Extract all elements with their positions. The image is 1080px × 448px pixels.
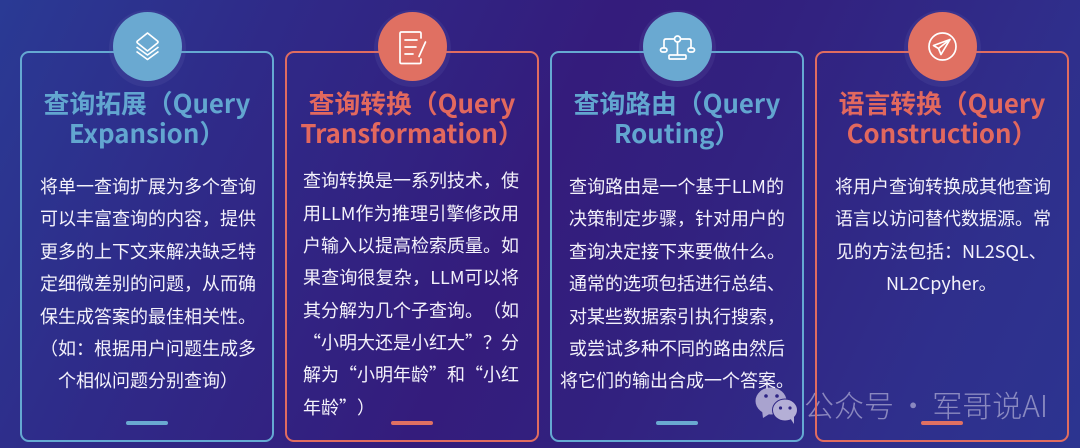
heading: Routing） (614, 114, 740, 151)
body text: 查询路由是一个基于LLM的 (569, 173, 784, 199)
icon: document with pen (378, 12, 446, 80)
icon: scales (642, 12, 712, 80)
body text: 见的方法包括：NL2SQL、 (836, 238, 1047, 264)
body text: 更多的上下文来解决缺乏特 (40, 238, 256, 264)
icon halo (904, 10, 980, 87)
body text: 可以丰富查询的内容，提供 (40, 205, 256, 231)
heading: 查询转换（Query (309, 84, 515, 121)
heading (839, 84, 1045, 151)
body text (303, 167, 519, 420)
heading (300, 84, 524, 151)
body text: 定细微差别的问题，从而确 (40, 270, 256, 296)
body text (40, 173, 256, 393)
watermark: 公众号 军哥说AI (756, 382, 1048, 426)
body text: 个相似问题分别查询） (58, 367, 238, 393)
body text: 将它们的输出合成一个答案。 (560, 367, 794, 393)
heading: 语言转换（Query (839, 84, 1045, 121)
body text: 户输入以提高检索质量。如 (303, 232, 519, 258)
card border (550, 51, 804, 442)
icon halo (108, 10, 186, 87)
body text: 通常的选项包括进行总结、 (569, 270, 785, 296)
body text: “小明大还是小红大”？分 (303, 329, 519, 355)
body text: 语言以访问替代数据源。常 (835, 205, 1051, 231)
heading: 查询路由（Query (574, 84, 780, 121)
card border (285, 51, 539, 442)
panel: 语言转换 (815, 10, 1069, 442)
accent bar (656, 421, 698, 425)
heading (574, 84, 780, 151)
body text: 将单一查询扩展为多个查询 (40, 173, 256, 199)
icon halo (374, 10, 450, 87)
body text: 年龄”） (303, 394, 375, 420)
body text: 查询转换是一系列技术，使 (303, 167, 519, 193)
accent bar (126, 421, 168, 425)
body text: 对某些数据索引执行搜索， (569, 303, 785, 329)
body text: 或尝试多种不同的路由然后 (569, 335, 785, 361)
body text: （如：根据用户问题生成多 (40, 335, 256, 361)
watermark text: 公众号 · 军哥说AI (804, 382, 1048, 426)
heading: 查询拓展（Query (44, 84, 250, 121)
icon: paper plane (908, 12, 976, 80)
heading: Construction） (847, 114, 1037, 151)
panel: 查询路由 (550, 10, 804, 442)
body text: 保生成答案的最佳相关性。 (40, 303, 256, 329)
heading (44, 84, 250, 151)
icon halo (638, 10, 716, 87)
body text: 决策制定步骤，针对用户的 (569, 205, 785, 231)
body text: 果查询很复杂，LLM可以将 (303, 264, 519, 290)
body text: 将用户查询转换成其他查询 (835, 173, 1051, 199)
icon: layers (112, 12, 182, 80)
body text: 其分解为几个子查询。（如 (303, 297, 519, 323)
heading: Transformation） (300, 114, 524, 151)
accent bar (921, 421, 963, 425)
body text (835, 173, 1051, 296)
body text: 查询决定接下来要做什么。 (569, 238, 785, 264)
body text: 用LLM作为推理引擎修改用 (303, 200, 519, 226)
body text (560, 173, 794, 393)
panel: 查询拓展 (20, 10, 274, 442)
panel: 查询转换 (285, 10, 539, 442)
icon: wechat (756, 388, 797, 424)
card border (20, 51, 274, 442)
accent bar (391, 421, 433, 425)
card border (815, 51, 1069, 442)
heading: Expansion） (69, 114, 225, 151)
body text: NL2Cpyher。 (886, 270, 997, 296)
body text: 解为“小明年龄”和“小红 (303, 361, 519, 387)
